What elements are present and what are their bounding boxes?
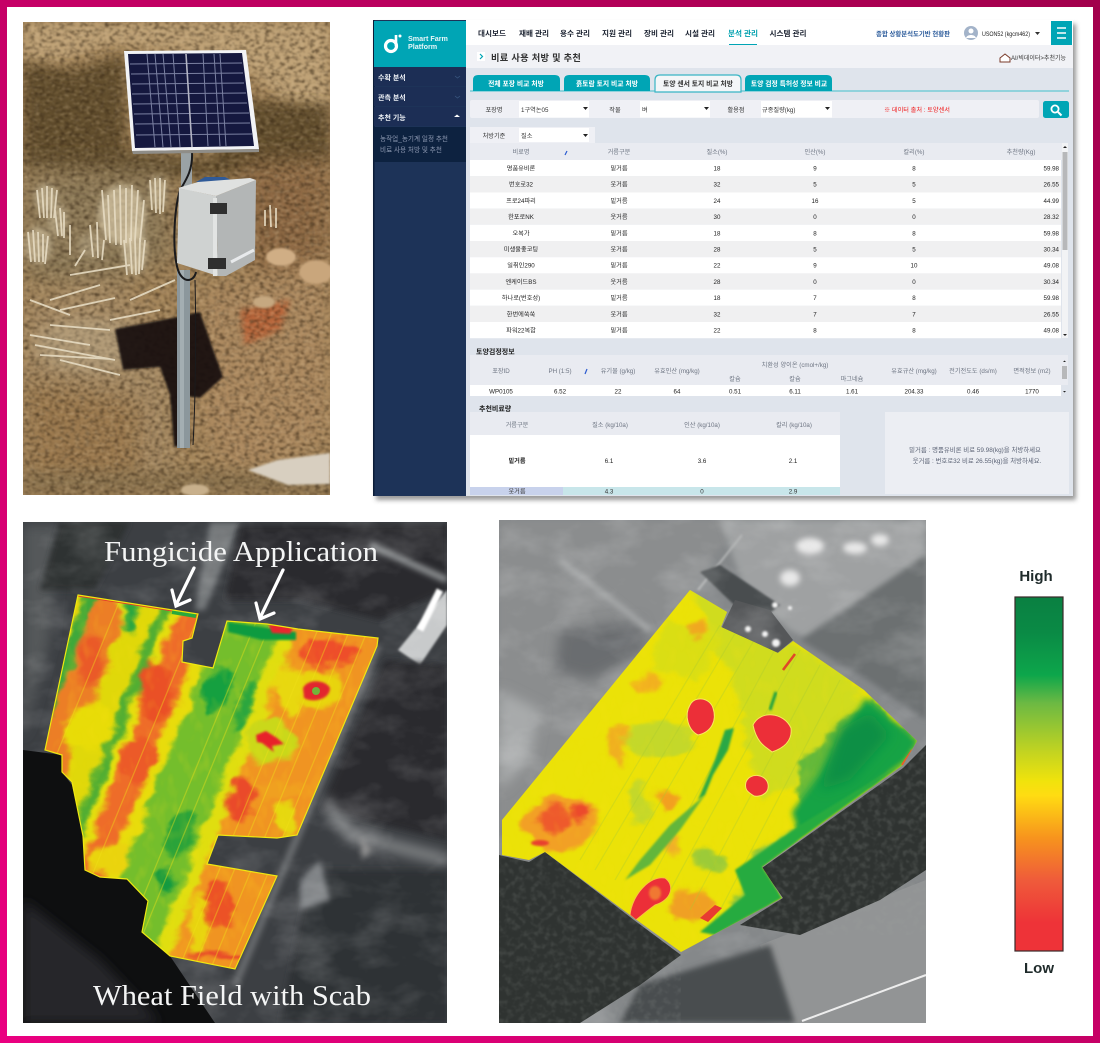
fertilizer table: 26.55 [1044, 182, 1060, 189]
fertilizer table: 0 [813, 279, 817, 286]
fertilizer table: 명품유비론 [507, 164, 536, 172]
top-field green rim and red spot [228, 622, 296, 640]
page title bar [466, 45, 1073, 68]
hamburger menu button [1051, 21, 1072, 45]
central green furrow [698, 728, 734, 800]
yellow-green vigour patches [690, 590, 864, 800]
left map: wheat field with scab, aerial NDVI image [0, 522, 447, 1023]
shadow of station on ground [115, 312, 223, 447]
sidebar menu: 추천 기능 [378, 113, 406, 122]
fertilizer table: 49.08 [1044, 328, 1060, 334]
prescription recommendation note: 밑거름 : 명품유비론 비료 59.98(kg)을 처방하세요 [909, 445, 1041, 454]
soil test information table: 전기전도도 (ds/m) [949, 367, 997, 375]
screenshot shadow [376, 24, 1076, 500]
top navigation [466, 20, 1073, 46]
fertilizer table [470, 143, 1068, 338]
fertilizer table: 32 [714, 182, 721, 189]
search button [1043, 101, 1069, 118]
fertilizer table: 엔케이드BS [505, 278, 537, 286]
scab hot spot with ring [303, 681, 330, 700]
fertilizer table: 웃거름 [610, 181, 628, 189]
user avatar and name: USON52 (kgcm462) [982, 31, 1030, 38]
filter bar: ※ 데이터 출처 : 토양센서 [884, 106, 950, 114]
prescription recommendation note: 웃거름 : 번호로32 비료 26.55(kg)을 처방하세요. [913, 456, 1042, 465]
fertilizer table: 18 [714, 295, 721, 302]
fertilizer table: 7 [813, 295, 817, 302]
sidebar submenu: 비료 사용 처방 및 추천 [380, 145, 442, 154]
fertilizer table: 밑거름 [610, 262, 628, 270]
fertilizer table: 프로24파리 [506, 197, 536, 205]
fertilizer table: 미생물좋코팅 [504, 246, 538, 254]
top navigation: 종합 상황분석도기반 현황판 [876, 29, 950, 38]
recommended fertilizer amount table: 질소 (kg/10a) [592, 421, 628, 429]
fertilizer table: 28.32 [1044, 214, 1060, 221]
soil test information table: 0.51 [729, 388, 742, 396]
fertilizer table: 8 [813, 230, 817, 237]
fertilizer table: 칼리(%) [903, 148, 925, 156]
tab: soil sensor comparison, active [655, 75, 741, 92]
fertilizer table: 26.55 [1044, 311, 1060, 318]
soil test information table: 유효규산 (mg/kg) [891, 367, 937, 375]
right map: crop vigour aerial NDVI image [490, 520, 930, 1023]
fertilizer table: 30.34 [1044, 279, 1060, 286]
fertilizer table: 일취인290 [507, 262, 535, 270]
legend gradient bar [1015, 597, 1063, 951]
soil test information table: 칼슘 [729, 375, 741, 383]
prescription recommendation note [885, 412, 1069, 494]
fine crop row streaks [580, 625, 840, 920]
fertilizer table: 9 [813, 166, 817, 172]
fertilizer table: 7 [813, 311, 817, 318]
rocks [181, 248, 333, 496]
dense-canopy green band [792, 698, 917, 835]
fertilizer table: 28 [714, 246, 721, 254]
fertilizer table: 0 [813, 214, 817, 221]
fertilizer table: 5 [912, 198, 916, 205]
recommended fertilizer amount table: 웃거름 [508, 488, 526, 496]
fertilizer table: 18 [714, 166, 721, 172]
bright clouds/soil highlights [780, 534, 889, 586]
fertilizer table: 5 [912, 182, 916, 189]
sidebar submenu [374, 127, 466, 162]
aerial background [23, 522, 447, 1023]
recommended fertilizer amount table: 2.1 [789, 458, 798, 465]
platform logo: Platform [408, 42, 437, 51]
fertilizer table: 파워22복합 [506, 326, 536, 334]
soil test information table: 6.52 [554, 388, 567, 396]
recommended fertilizer amount table: 거름구분 [506, 421, 529, 429]
fertilizer table: 밑거름 [610, 197, 628, 205]
fertilizer table: 질소(%) [706, 148, 728, 156]
filter bar: 작물 [609, 107, 621, 114]
soil test information table: 204.33 [905, 388, 924, 396]
steel mounting pole [174, 152, 196, 448]
filter bar: 처방기준 [483, 132, 506, 140]
fertilizer table: 밑거름 [610, 294, 628, 302]
legend label: Low: Low [1024, 960, 1054, 977]
left sidebar [373, 20, 466, 496]
legend label: High: High [1019, 568, 1053, 585]
soil test information table: 0.46 [967, 388, 980, 396]
fertilizer table: 하나로(번호성) [502, 294, 540, 302]
recommended fertilizer amount table: 3.6 [698, 458, 707, 465]
fertilizer table: 0 [912, 279, 916, 286]
soil test information table [470, 347, 1068, 396]
fertilizer table: 5 [813, 246, 817, 254]
flat stone [248, 453, 330, 485]
dark-green patches [198, 662, 236, 717]
fertilizer table: 한포로NK [508, 214, 535, 221]
dark tree line [23, 750, 215, 1023]
soil test information table: 22 [615, 388, 622, 396]
photo: solar-powered soil sensor station in a field [23, 22, 333, 496]
recommended fertilizer amount table: 밑거름 [508, 457, 526, 465]
ground colour zones [23, 22, 330, 495]
user avatar and name [964, 26, 1040, 40]
soil test information table: 유효인산 (mg/kg) [654, 367, 700, 375]
fertilizer table: 밑거름 [610, 164, 628, 172]
soil test information table: 64 [674, 388, 681, 396]
recommended fertilizer amount table: 6.1 [605, 458, 614, 465]
soil test information table: 포장ID [492, 367, 510, 375]
caption: Fungicide Application: Fungicide Application [104, 536, 379, 568]
fertilizer table: 오복가 [512, 229, 530, 237]
recommended fertilizer amount table: 4.3 [605, 488, 614, 496]
fertilizer table: 30.34 [1044, 246, 1060, 254]
page title bar: 비료 사용 처방 및 추천 [491, 52, 581, 63]
fertilizer table: 0 [912, 214, 916, 221]
top navigation: 시스템 관리 [769, 28, 807, 38]
platform logo [374, 21, 466, 67]
top navigation: 분석 관리 [728, 28, 758, 38]
fertilizer table: 59.98 [1044, 166, 1060, 172]
tab: soil-map comparison [564, 75, 650, 91]
yellow patches [62, 706, 114, 750]
page title bar: AI/빅데이터>추천기능 [1011, 54, 1066, 62]
filter bar: 포장명 [485, 106, 503, 114]
top navigation: 대시보드 [478, 28, 506, 38]
fertilizer table: 인산(%) [804, 148, 826, 156]
top navigation: 시설 관리 [685, 28, 715, 38]
soil test information table: 면적정보 (m2) [1013, 367, 1051, 375]
top navigation: 지원 관리 [602, 28, 632, 38]
filter bar: 활용점 [727, 106, 745, 114]
tab: whole-field comparison: 전체 포장 비교 처방 [488, 79, 545, 88]
fertilizer table: 59.98 [1044, 230, 1060, 237]
top navigation: 장비 관리 [644, 28, 674, 38]
fertilizer table: 웃거름 [610, 246, 628, 254]
fertilizer table: 24 [714, 198, 721, 205]
soil test information table: PH (1:5) [548, 368, 572, 375]
top navigation: 용수 관리 [560, 28, 590, 38]
fertilizer table: 10 [911, 263, 918, 270]
fertilizer table: 웃거름 [610, 213, 628, 221]
tab: soil test comparison: 토양 검정 특허성 정보 비교 [751, 79, 827, 88]
soil test information table: 토양검정정보 [476, 347, 515, 356]
arrow: left fungicide pass [172, 568, 194, 606]
sidebar menu: 수확 분석 [378, 73, 406, 82]
fertilizer table: 44.99 [1044, 198, 1060, 205]
fertilizer table: 30 [714, 214, 721, 221]
fertilizer table: 5 [813, 182, 817, 189]
platform logo: Smart Farm [408, 34, 448, 43]
fertilizer table: 28 [714, 279, 721, 286]
filter bar: 규종질량(kg) [762, 106, 795, 114]
caption: Wheat Field with Scab: Wheat Field with Scab [93, 980, 371, 1012]
fertilizer table: 5 [912, 246, 916, 254]
fertilizer table: 22 [714, 328, 721, 334]
fertilizer table: 49.08 [1044, 263, 1060, 270]
fine yellow crop streaks [56, 603, 366, 968]
soil test information table: 칼슘 [789, 375, 801, 383]
top navigation: 재배 관리 [519, 28, 549, 38]
fertilizer table: 22 [714, 263, 721, 270]
recommended fertilizer amount table: 추천비료량 [479, 404, 512, 413]
recommended fertilizer amount table [470, 404, 840, 496]
tab: soil test comparison [745, 75, 832, 91]
fertilizer table: 59.98 [1044, 295, 1060, 302]
dry rice stubble [24, 176, 276, 375]
fertilizer table: 밑거름 [610, 326, 628, 334]
solar panel [124, 50, 259, 154]
tab: soil sensor comparison, active: 토양 센서 토지 비교 처방 [663, 79, 734, 88]
soil test information table: 치환성 양이온 (cmol+/kg) [762, 361, 828, 369]
soil test information table: 6.11 [789, 388, 801, 396]
low-vigour red blobs [687, 699, 714, 735]
sidebar menu [374, 67, 466, 126]
bright buildings [745, 602, 792, 647]
lower-right pale field [760, 880, 926, 1023]
recommended fertilizer amount table: 인산 (kg/10a) [684, 421, 720, 429]
aerial background [499, 520, 926, 1023]
filter bar: 벼 [642, 106, 648, 114]
arrow: right fungicide pass [256, 570, 283, 619]
soil test information table: 마그네슘 [841, 375, 864, 383]
NDVI field colour map [46, 596, 378, 968]
sidebar menu: 관측 분석 [378, 93, 406, 102]
fertilizer table: 8 [912, 295, 916, 302]
sidebar submenu: 농작업_농기계 일정 추천 [380, 134, 448, 143]
dashboard screenshot: Smart Farm Platform fertilizer recommendation [373, 20, 1073, 496]
fertilizer table: 18 [714, 230, 721, 237]
soil test information table: 1770 [1025, 388, 1039, 396]
deep red/orange patches [301, 638, 353, 666]
tab: whole-field comparison [473, 75, 560, 91]
fertilizer table: 9 [813, 263, 817, 270]
NDVI field colour map [490, 580, 930, 960]
filter bar [470, 100, 1069, 143]
fertilizer table: 7 [912, 311, 916, 318]
scab hot spot [256, 731, 284, 752]
fertilizer table: 웃거름 [610, 278, 628, 286]
filter bar: 질소 [521, 132, 533, 140]
fertilizer table: 비료명 [512, 148, 530, 156]
fertilizer table: 추천량(Kg) [1007, 148, 1035, 156]
field outline [45, 595, 378, 969]
fertilizer table: 32 [714, 311, 721, 318]
fertilizer table: 번호로32 [509, 181, 534, 189]
fertilizer table: 8 [912, 230, 916, 237]
fertilizer table: 8 [813, 328, 817, 334]
fertilizer table: 16 [812, 198, 819, 205]
soil test information table: WP0105 [489, 388, 513, 396]
fertilizer table: 밑거름 [610, 229, 628, 237]
filter bar: 1구역논05 [521, 106, 549, 114]
soil test information table: 유기물 (g/kg) [601, 367, 635, 375]
fertilizer table: 8 [912, 328, 916, 334]
fertilizer table: 한번에쑥쑥 [507, 310, 536, 318]
recommended fertilizer amount table: 칼리 (kg/10a) [776, 421, 812, 429]
recommended fertilizer amount table: 2.9 [789, 488, 798, 496]
fertilizer table: 웃거름 [610, 310, 628, 318]
soil test information table: 1.61 [846, 388, 859, 396]
fertilizer table: 거름구분 [608, 148, 631, 156]
dark tree lines [499, 745, 926, 1023]
white sensor enclosure [177, 177, 256, 276]
tab: soil-map comparison: 흙토람 토지 비교 처방 [576, 79, 639, 88]
orange patches [688, 624, 708, 640]
colour scale legend [1015, 568, 1063, 977]
recommended fertilizer amount table: 0 [700, 488, 704, 496]
fertilizer table: 8 [912, 166, 916, 172]
ground base [23, 22, 330, 495]
tab bar [470, 75, 1069, 92]
